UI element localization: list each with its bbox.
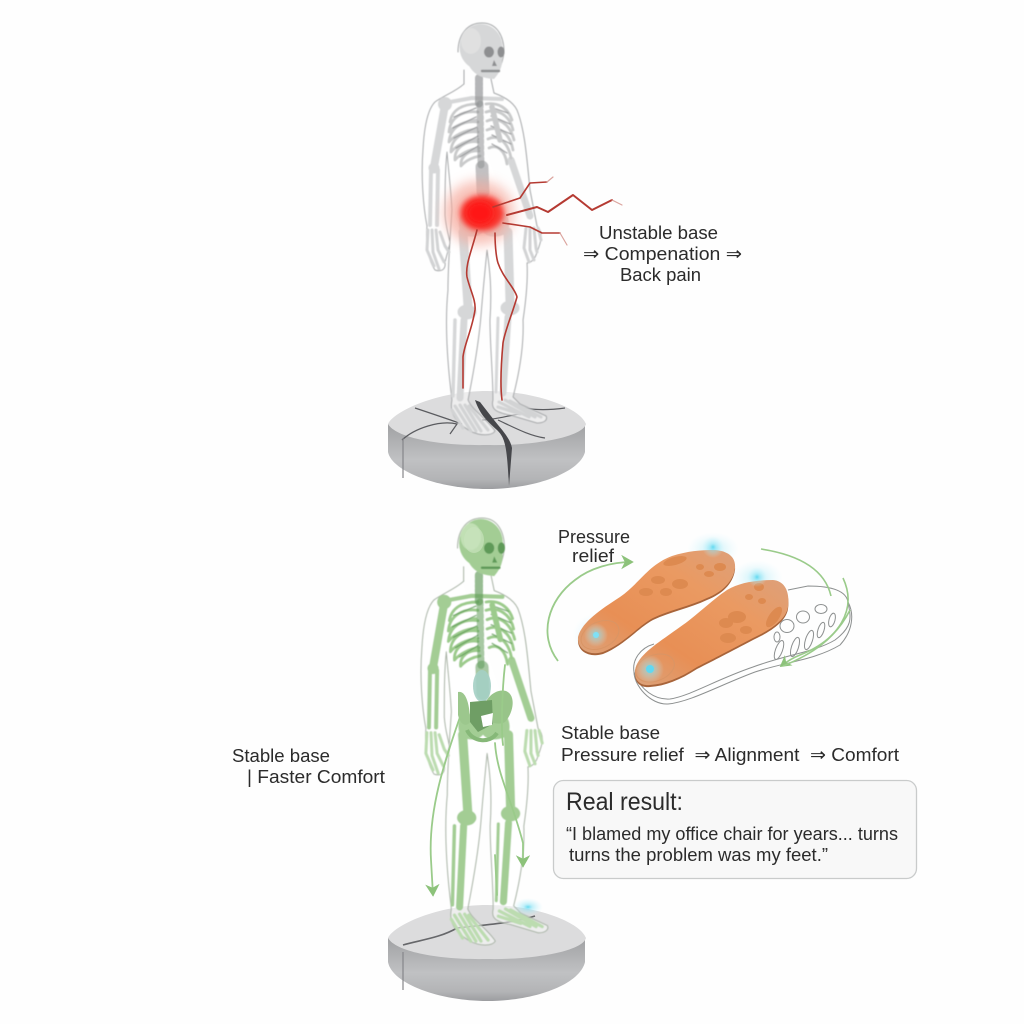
label: pressure relief	[558, 526, 630, 566]
callout quote: “I blamed my office chair for years... turns	[566, 823, 898, 844]
shoe sole outline	[634, 586, 852, 704]
text: unstable base chain: Back pain	[620, 264, 701, 285]
motion arrows right	[761, 549, 850, 666]
label: pressure relief: relief	[572, 545, 615, 566]
skeleton, grey	[422, 23, 547, 435]
insoles	[547, 532, 852, 704]
pain nerve lines	[463, 177, 622, 400]
pressure glow at foot	[513, 898, 543, 916]
panel: stable base figure	[388, 518, 586, 1001]
right insole	[632, 560, 788, 687]
skeleton, green	[421, 518, 548, 945]
callout quote	[566, 823, 898, 865]
callout: real result	[554, 780, 916, 878]
pressure points	[584, 536, 767, 683]
text: stable base chain: Pressure relief ⇒ Alignment ⇒ Comfort	[561, 744, 899, 765]
pelvis, green	[458, 670, 513, 740]
text: stable base chain: Stable base	[561, 722, 660, 743]
label: pressure relief: Pressure	[558, 526, 630, 547]
text: faster comfort	[232, 745, 385, 787]
motion arrow left	[547, 562, 632, 661]
left insole	[572, 532, 739, 657]
text: faster comfort: Stable base	[232, 745, 330, 766]
callout quote: turns the problem was my feet.”	[569, 844, 828, 865]
stone pedestal cracked	[388, 391, 586, 489]
text: faster comfort: | Faster Comfort	[247, 766, 385, 787]
text: unstable base chain: ⇒ Compenation ⇒	[583, 243, 742, 264]
text: unstable base chain	[583, 222, 742, 285]
pain glow at hip	[444, 181, 514, 245]
flow arrows down legs	[431, 665, 523, 895]
callout heading: Real result:	[566, 788, 683, 816]
text: stable base chain	[561, 722, 899, 765]
head tint	[464, 527, 484, 553]
panel: unstable base figure	[388, 23, 622, 489]
stone pedestal	[388, 905, 586, 1001]
text: unstable base chain: Unstable base	[599, 222, 718, 243]
